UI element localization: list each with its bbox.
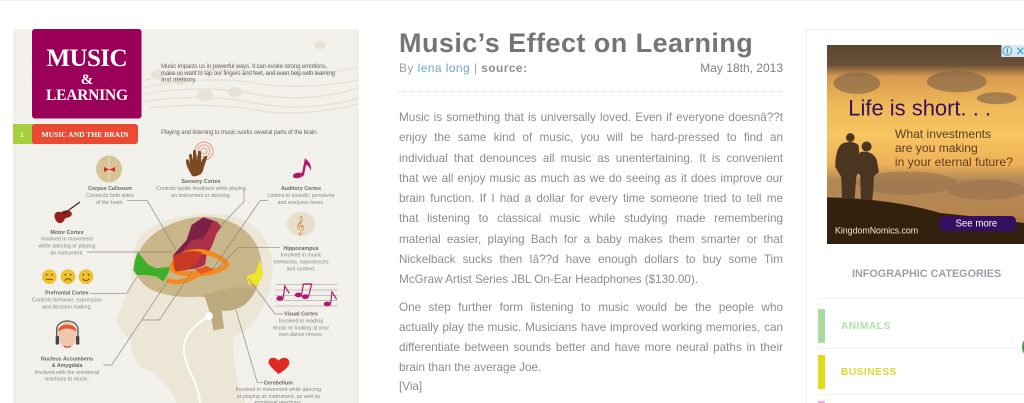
icon: sheet music notes bbox=[275, 284, 337, 306]
label: motor cortex bbox=[39, 230, 95, 256]
article byline bbox=[399, 61, 783, 75]
brain bbox=[136, 217, 262, 310]
green prefrontal region bbox=[133, 252, 170, 282]
label: auditory cortex: Auditory Cortex bbox=[281, 186, 321, 192]
orange limbic ring bbox=[172, 251, 227, 274]
label: cerebellum bbox=[236, 380, 321, 403]
article body text: Nickelback sucks then Iâ??d have enough dollars to buy some Tim bbox=[399, 253, 783, 266]
title block: & bbox=[81, 72, 93, 88]
label: hippocampus: Involved in music bbox=[281, 253, 322, 259]
label: auditory cortex bbox=[268, 186, 335, 206]
label: prefrontal cortex: Controls behavior, expression bbox=[32, 297, 102, 303]
article body text: [Via] bbox=[399, 380, 422, 393]
icon: violin bbox=[54, 202, 80, 223]
hill bbox=[827, 197, 1024, 244]
category: animals bbox=[818, 309, 891, 343]
dotted divider bbox=[399, 91, 783, 92]
title block: MUSIC bbox=[46, 45, 128, 72]
category: business bbox=[818, 355, 897, 389]
label: auditory cortex: Listens to sounds; perceives bbox=[268, 193, 335, 199]
label: corpus callosum: Corpus Callosum bbox=[88, 186, 132, 192]
head silhouette bbox=[116, 214, 273, 403]
silhouette couple bbox=[835, 133, 879, 200]
label: hippocampus bbox=[273, 246, 329, 272]
article body text: One step further form listening to music would be the people who bbox=[399, 301, 783, 314]
icon: music note bbox=[293, 158, 311, 178]
advertisement bbox=[827, 45, 1024, 244]
article body text: material easier, playing Bach for a baby makes them smarter or that bbox=[399, 233, 783, 246]
label: sensory cortex: an instrument or dancing. bbox=[171, 193, 231, 199]
category rule bbox=[818, 298, 1024, 299]
intro text: Music impacts us in powerful ways. It can evoke strong emotions, bbox=[161, 63, 327, 70]
label: prefrontal cortex bbox=[32, 291, 102, 310]
ad subtext: What investments bbox=[895, 127, 991, 141]
icon: heart bbox=[269, 358, 289, 374]
label: nucleus accumbens: Involved with the emotional bbox=[35, 370, 99, 376]
decorative music staff bbox=[145, 67, 359, 113]
label: motor cortex: Motor Cortex bbox=[50, 230, 84, 236]
label: motor cortex: an instrument. bbox=[50, 250, 84, 256]
category: next bar bbox=[818, 401, 825, 403]
section banner bbox=[13, 124, 138, 144]
ad subtext: in your eternal future? bbox=[895, 155, 1013, 169]
article body text: McGraw Artist Series JBL On-Ear Headphones ($130.00). bbox=[399, 273, 698, 286]
label: nucleus accumbens: reactions to music. bbox=[45, 377, 89, 383]
article body text: actually play the music. Musicians have improved working memories, can bbox=[399, 321, 783, 334]
section intro: Playing and listening to music works several parts of the brain: bbox=[161, 130, 318, 136]
category rule bbox=[818, 394, 1024, 395]
icon: head with headphones bbox=[56, 321, 79, 348]
sidebar heading: INFOGRAPHIC CATEGORIES bbox=[852, 268, 1001, 280]
article body text: that listening to classical music while studying made remembering bbox=[399, 212, 783, 225]
yellow visual region bbox=[247, 260, 263, 285]
motor and sensory regions bbox=[173, 217, 222, 271]
article title: Music’s Effect on Learning bbox=[399, 28, 753, 58]
icon: sensory hand bbox=[186, 142, 213, 176]
icon: three faces bbox=[42, 269, 93, 284]
ad button bbox=[939, 216, 1016, 231]
leader lines bbox=[87, 190, 283, 383]
article body text: that we all enjoy music as much as we do seeing as it does improve our bbox=[399, 172, 783, 185]
label: visual cortex: music or looking at your bbox=[273, 325, 329, 331]
label: auditory cortex: and analyzes tones. bbox=[277, 200, 325, 206]
label: nucleus accumbens: & Amygdala bbox=[52, 363, 82, 369]
label: hippocampus: and context. bbox=[286, 266, 316, 272]
label: cerebellum: Cerebellum bbox=[264, 380, 293, 386]
title block bbox=[32, 29, 142, 118]
label: hippocampus: Hippocampus bbox=[283, 246, 319, 252]
label: hippocampus: memories, experiences bbox=[273, 260, 329, 266]
sidebar panel bbox=[806, 29, 1024, 403]
label: motor cortex: while dancing or playing bbox=[39, 244, 95, 250]
floating green button bbox=[1022, 335, 1024, 359]
ad domain: KingdomNomics.com bbox=[835, 226, 918, 236]
intro text: make us want to tap our fingers and feet, and even help with learning bbox=[161, 70, 336, 77]
icon: treble clef cloud bbox=[287, 212, 315, 236]
intro text bbox=[161, 63, 336, 84]
article body text: differentiate between sounds better and have more neural paths in their bbox=[399, 341, 783, 354]
section banner: MUSIC AND THE BRAIN bbox=[42, 130, 129, 139]
label: prefrontal cortex: and decision making. bbox=[42, 304, 92, 310]
lower diagram bbox=[32, 190, 337, 403]
ad choices badge bbox=[1001, 45, 1024, 57]
icon: corpus callosum brain bbox=[96, 156, 122, 182]
intro text: and memory. bbox=[161, 76, 197, 84]
ad subtext: are you making bbox=[895, 141, 978, 155]
label: visual cortex: Involved in reading bbox=[279, 318, 323, 324]
ad headline: Life is short. . . bbox=[848, 96, 991, 121]
label: visual cortex: Visual Cortex bbox=[284, 312, 318, 318]
section banner: 1 bbox=[20, 132, 24, 139]
article body text: individual that denounces all music as unentertaining. It is convenient bbox=[399, 152, 783, 165]
label: nucleus accumbens bbox=[35, 356, 99, 383]
earbud and cable bbox=[184, 316, 209, 403]
infographic image panel bbox=[13, 29, 359, 403]
label: corpus callosum: of the brain. bbox=[96, 200, 124, 206]
title block: LEARNING bbox=[46, 87, 128, 104]
label: prefrontal cortex: Prefrontal Cortex bbox=[45, 291, 89, 297]
article byline: By lena long | source: bbox=[399, 61, 527, 75]
label: motor cortex: Involved in movement bbox=[41, 237, 93, 243]
category: business: BUSINESS bbox=[841, 367, 897, 378]
article body text: Music is something that is universally loved. Even if everyone doesnâ??t bbox=[399, 111, 783, 124]
article body text: enjoy the same kind of music, you will be hard-pressed to find an bbox=[399, 131, 783, 144]
label: cerebellum: or playing an instrument, as well as bbox=[237, 394, 320, 400]
icon: treble clef cloud: 𝄞 bbox=[295, 216, 305, 236]
label: nucleus accumbens: Nucleus Accumbens bbox=[41, 356, 93, 362]
ad button: See more bbox=[956, 219, 997, 230]
label: sensory cortex bbox=[156, 179, 246, 199]
category: animals: ANIMALS bbox=[841, 321, 891, 332]
cerebellum and brainstem bbox=[204, 287, 256, 331]
label: cerebellum: Involved in movement while dancing bbox=[236, 387, 321, 393]
article body text: brain function. If I had a dollar for every time someone tried to tell me bbox=[399, 192, 783, 205]
label: corpus callosum: Connects both sides bbox=[86, 193, 134, 199]
article byline: May 18th, 2013 bbox=[700, 61, 783, 75]
label: visual cortex bbox=[273, 312, 329, 338]
label: sensory cortex: Controls tactile feedback while playing bbox=[156, 186, 246, 192]
label: corpus callosum bbox=[86, 186, 134, 206]
article body text bbox=[399, 111, 783, 393]
top rule bbox=[0, 0, 1024, 1]
label: sensory cortex: Sensory Cortex bbox=[181, 179, 221, 185]
ad subtext bbox=[895, 127, 1013, 169]
category rule bbox=[818, 348, 1024, 349]
article body text: brain than the average Joe. bbox=[399, 361, 541, 374]
clouds bbox=[834, 71, 1017, 104]
label: visual cortex: own dance moves. bbox=[279, 332, 323, 338]
